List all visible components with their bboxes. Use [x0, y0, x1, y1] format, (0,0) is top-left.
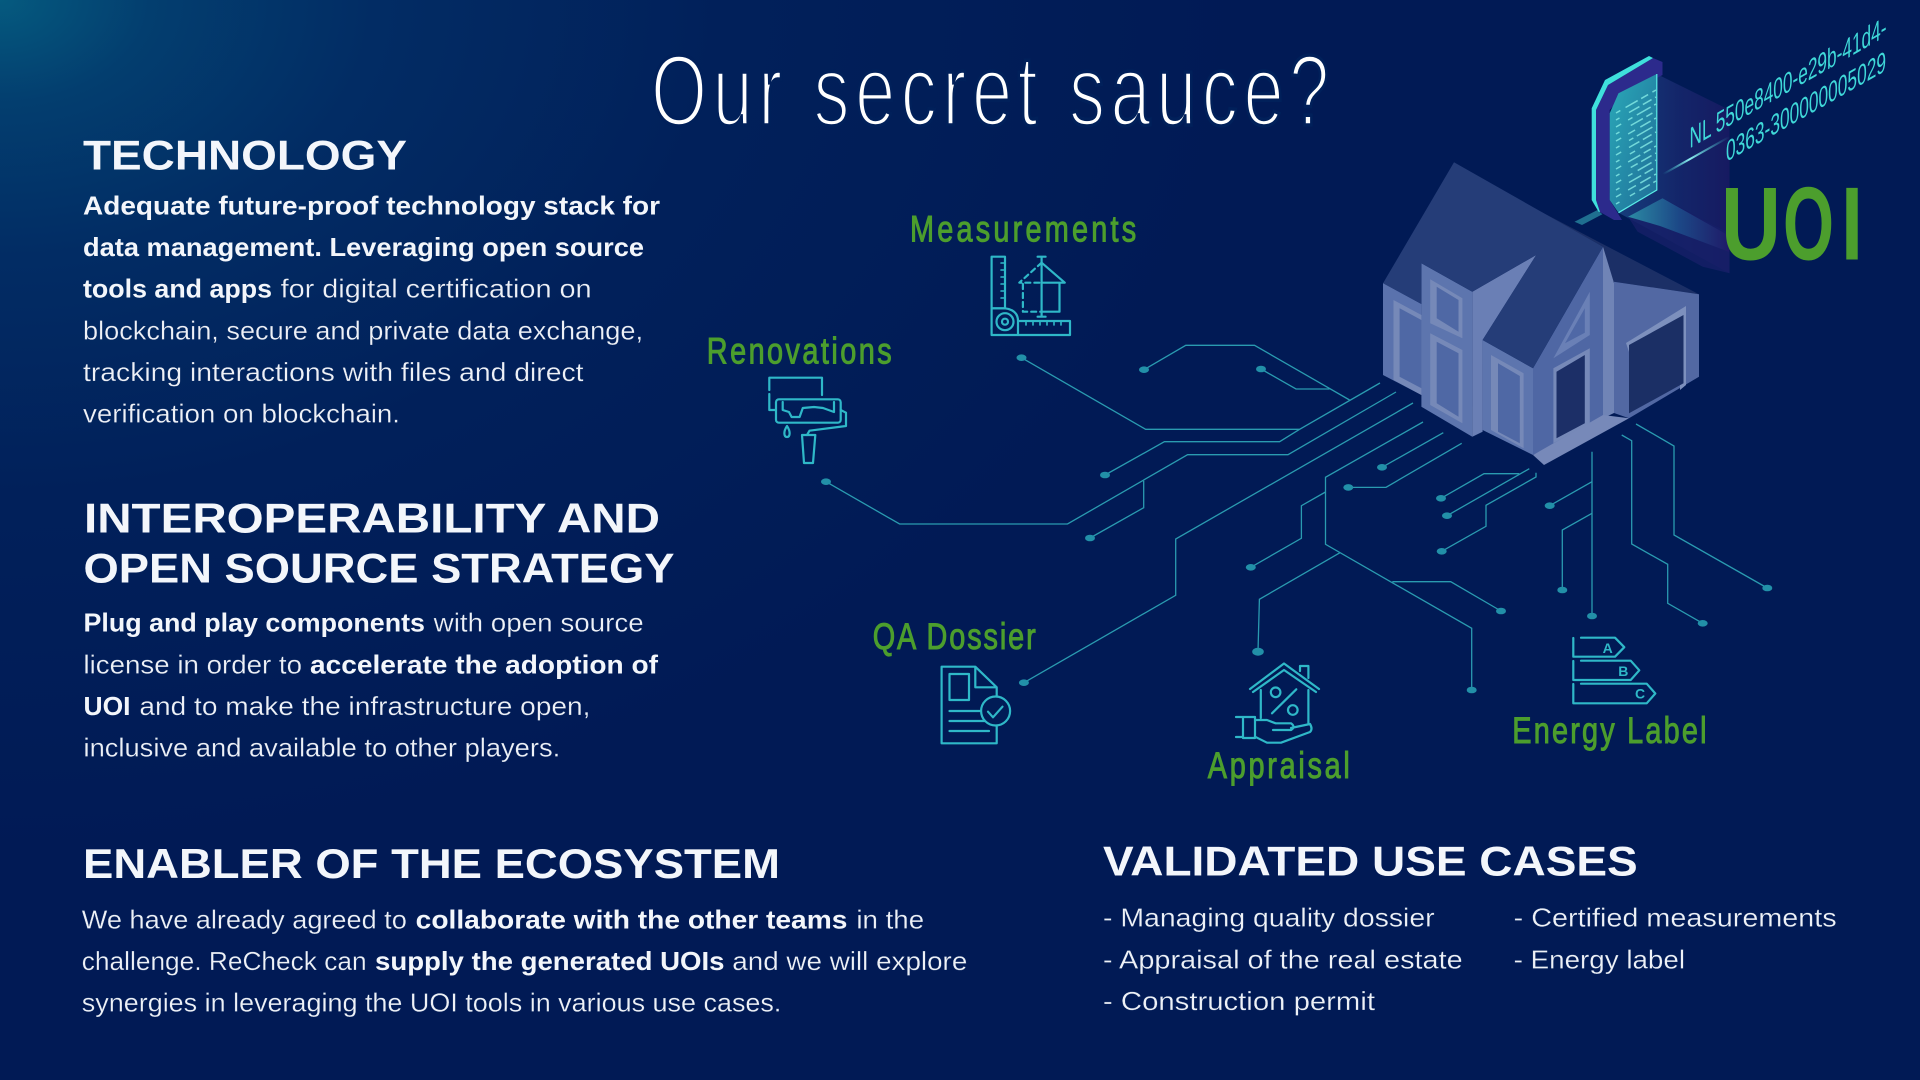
- text block: interoperability: license in order to: [84, 649, 302, 679]
- text block: technology: tools and apps: [83, 274, 272, 304]
- text block: ecosystem: in the: [856, 904, 924, 934]
- list: use cases: - Appraisal of the real estate: [1103, 944, 1463, 974]
- icon: document check: [942, 667, 1010, 743]
- house illustration: [1383, 162, 1699, 465]
- text block: interoperability: and to make the infrastructure open,: [139, 691, 590, 721]
- label: renovations: Renovations: [707, 331, 892, 372]
- window: triangle: [1553, 292, 1590, 358]
- circuit traces: [821, 345, 1772, 693]
- text block: interoperability: UOI: [84, 691, 130, 721]
- text block: interoperability: Plug and play components: [84, 608, 425, 638]
- icon: energy label: B: [1618, 663, 1628, 679]
- UOI label: O: [1783, 166, 1834, 282]
- text block: technology: data management. Leveraging open source: [83, 232, 644, 262]
- heading: interoperability: OPEN SOURCE STRATEGY: [84, 544, 674, 591]
- text block: ecosystem: synergies in leveraging the UOI tools in various use cases.: [82, 988, 781, 1018]
- window: upper bay: [1430, 279, 1462, 338]
- icon: paint roller: [769, 378, 846, 463]
- window: left: [1394, 300, 1421, 395]
- window: lower bay: [1430, 333, 1462, 423]
- label: energy label: Energy Label: [1512, 711, 1707, 752]
- text block: technology: for digital certification on: [281, 274, 592, 304]
- label: appraisal: Appraisal: [1208, 746, 1350, 787]
- list: use cases: - Managing quality dossier: [1103, 903, 1435, 933]
- list: use cases: - Construction permit: [1103, 986, 1376, 1016]
- label: QA dossier: QA Dossier: [873, 617, 1036, 658]
- heading: interoperability: [84, 494, 674, 591]
- UOI label: U: [1721, 166, 1781, 282]
- text block: ecosystem: challenge. ReCheck can: [82, 946, 367, 976]
- icon: energy label: A: [1603, 640, 1613, 656]
- heading: technology: TECHNOLOGY: [83, 132, 407, 178]
- list: use cases: - Certified measurements: [1514, 903, 1837, 933]
- icon: energy label: [1573, 638, 1655, 703]
- text block: ecosystem: We have already agreed to: [82, 904, 407, 934]
- text block: ecosystem: collaborate with the other teams: [416, 904, 847, 934]
- UOI label: [1721, 166, 1863, 282]
- icon: measurements: [992, 257, 1070, 335]
- icon: energy label: C: [1635, 686, 1645, 702]
- text block: technology: tracking interactions with files and direct: [83, 357, 584, 387]
- panel: interoperability: [84, 494, 674, 763]
- UOI label: I: [1841, 166, 1863, 282]
- text block: interoperability: with open source: [433, 608, 644, 638]
- panel: technology: [83, 132, 660, 429]
- text block: technology: [83, 190, 660, 429]
- heading: validated use cases: VALIDATED USE CASES: [1103, 838, 1638, 885]
- list: use cases: [1103, 903, 1837, 1016]
- heading: ecosystem: ENABLER OF THE ECOSYSTEM: [83, 840, 780, 887]
- panel: ecosystem: [82, 840, 967, 1018]
- window: centre: [1491, 355, 1524, 448]
- text block: technology: Adequate future-proof technology stack for: [83, 190, 660, 220]
- door: [1553, 348, 1590, 443]
- text block: technology: blockchain, secure and private data exchange,: [83, 315, 643, 345]
- title: Our secret sauce?: [651, 35, 1329, 147]
- text block: ecosystem: [82, 904, 967, 1018]
- text block: technology: verification on blockchain.: [83, 399, 400, 429]
- label: measurements: Measurements: [910, 209, 1136, 251]
- text block: interoperability: [84, 608, 658, 763]
- panel: validated use cases: [1103, 838, 1837, 1016]
- garage door: [1626, 306, 1686, 413]
- text block: ecosystem: supply the generated UOIs: [375, 946, 724, 976]
- device: UOI hologram: [1574, 56, 1730, 273]
- heading: interoperability: INTEROPERABILITY AND: [84, 494, 660, 541]
- icon: house in hand: [1236, 664, 1319, 743]
- text block: ecosystem: and we will explore: [732, 946, 967, 976]
- text block: interoperability: inclusive and available to other players.: [84, 733, 560, 763]
- text block: interoperability: accelerate the adoption of: [310, 649, 658, 679]
- list: use cases: - Energy label: [1514, 944, 1685, 974]
